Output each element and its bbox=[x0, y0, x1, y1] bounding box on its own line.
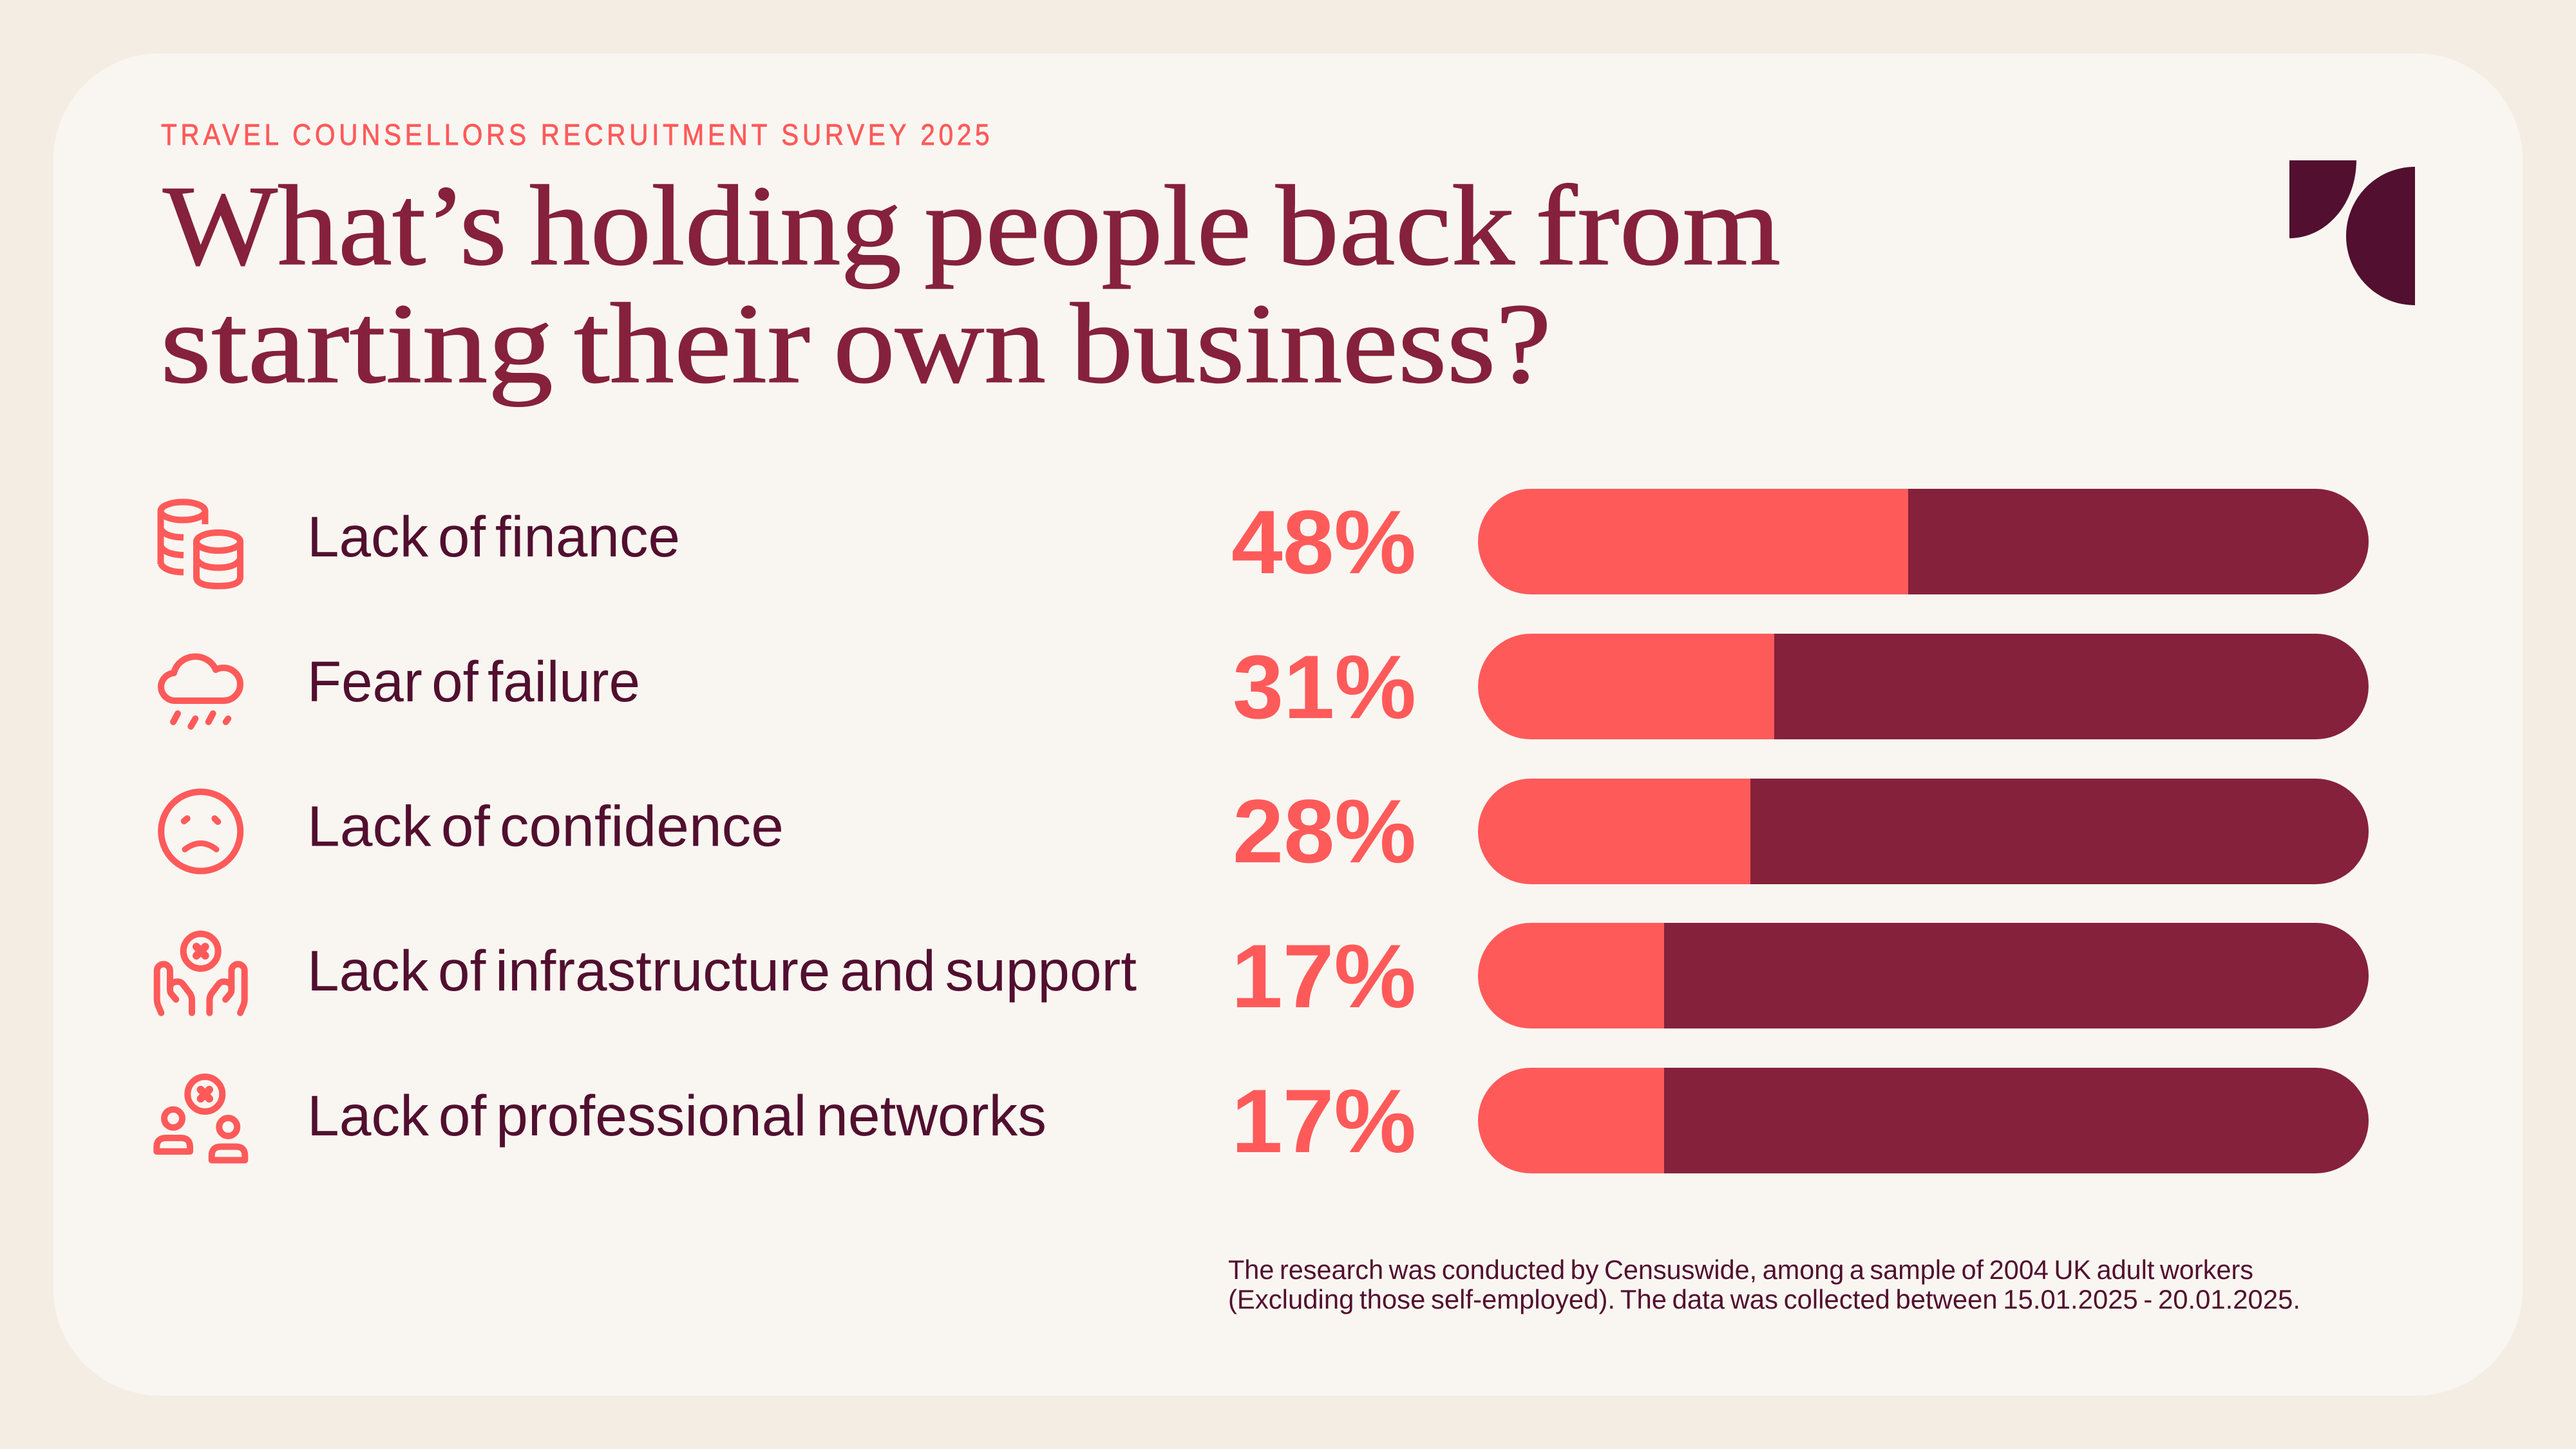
row: fear of failure bbox=[161, 634, 2369, 739]
footnote: methodology: The research was conducted by Censuswide, among a sample of 2004 UK adult workers bbox=[1228, 1255, 2253, 1285]
row: lack of infrastructure and support bbox=[157, 923, 2369, 1028]
label: Lack of professional networks bbox=[307, 1083, 1046, 1148]
bar: 48% bbox=[1478, 489, 2369, 594]
label: Lack of finance bbox=[307, 504, 680, 569]
icon: coin stacks bbox=[161, 502, 240, 586]
footnote: methodology bbox=[1228, 1255, 2300, 1314]
icon: hands with cross bbox=[157, 934, 245, 1013]
title: starting bbox=[160, 279, 553, 407]
icon: rain cloud bbox=[161, 657, 240, 726]
icon: sad face bbox=[161, 792, 240, 871]
row: lack of professional networks bbox=[156, 1068, 2369, 1173]
footnote: methodology: (Excluding those self-employed). The data was collected between 15.01.2025 - 20.01.2025. bbox=[1228, 1284, 2300, 1314]
row: lack of confidence bbox=[161, 779, 2369, 884]
title: their bbox=[574, 279, 810, 407]
value: 17% bbox=[1231, 1070, 1416, 1171]
value: 48% bbox=[1231, 491, 1416, 592]
bar: 17% bbox=[1478, 1068, 2369, 1173]
title: own bbox=[833, 279, 1046, 407]
eyebrow heading: TRAVEL COUNSELLORS RECRUITMENT SURVEY 2025 bbox=[161, 119, 990, 152]
row: lack of finance bbox=[161, 489, 2369, 594]
label: Lack of confidence bbox=[307, 793, 784, 858]
title: from bbox=[1535, 162, 1781, 289]
bar: 17% bbox=[1478, 923, 2369, 1028]
icon: people with cross bbox=[156, 1077, 245, 1160]
title bbox=[160, 162, 1781, 407]
title: What’s bbox=[163, 162, 507, 289]
title: holding bbox=[529, 162, 902, 289]
title: people bbox=[924, 162, 1251, 289]
value: 28% bbox=[1233, 781, 1416, 882]
value: 31% bbox=[1233, 636, 1416, 737]
label: Lack of infrastructure and support bbox=[307, 938, 1137, 1003]
title: business? bbox=[1070, 279, 1551, 407]
value: 17% bbox=[1231, 925, 1416, 1027]
title: back bbox=[1276, 162, 1515, 289]
bar: 31% bbox=[1478, 634, 2369, 739]
icon: brand logo bbox=[2289, 160, 2415, 305]
bar: 28% bbox=[1478, 779, 2369, 884]
label: Fear of failure bbox=[307, 649, 640, 714]
